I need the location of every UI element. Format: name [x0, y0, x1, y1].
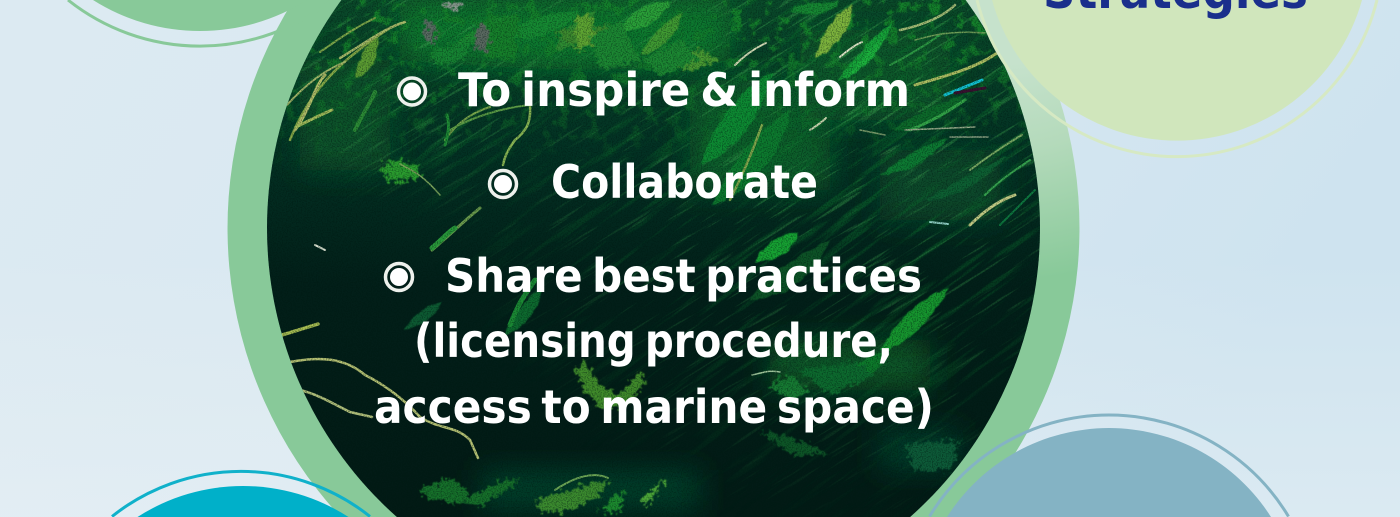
circle: top-right strategies [977, 0, 1377, 157]
photographic leaf texture [267, 0, 1040, 517]
bright mottled weeds at top [280, 0, 1026, 154]
soft colour masses [300, 0, 1000, 510]
text: Collaborate: Collaborate [551, 155, 818, 209]
bullet: share best practices [386, 264, 412, 290]
bright grass streaks [282, 5, 1035, 490]
circle: top-left green [68, 0, 332, 46]
film grain [267, 0, 1040, 517]
text: access to marine space: access to marine space) [374, 380, 934, 434]
broad leaves [355, 2, 1008, 377]
text: Share best practices: Share best practices [445, 249, 922, 303]
circular underwater seagrass photo [267, 0, 1040, 517]
bullet: collaborate [490, 170, 516, 198]
text: To inspire & inform: To inspire & inform [458, 63, 910, 117]
circle: bottom-right blue-grey [930, 415, 1288, 517]
text: licensing procedure: (licensing procedure, [414, 314, 893, 368]
moss clusters [380, 2, 960, 512]
bullet: to inspire [398, 78, 426, 105]
large green ring [228, 0, 1079, 517]
bullet list [374, 63, 934, 434]
circle: bottom-left teal [112, 471, 370, 517]
